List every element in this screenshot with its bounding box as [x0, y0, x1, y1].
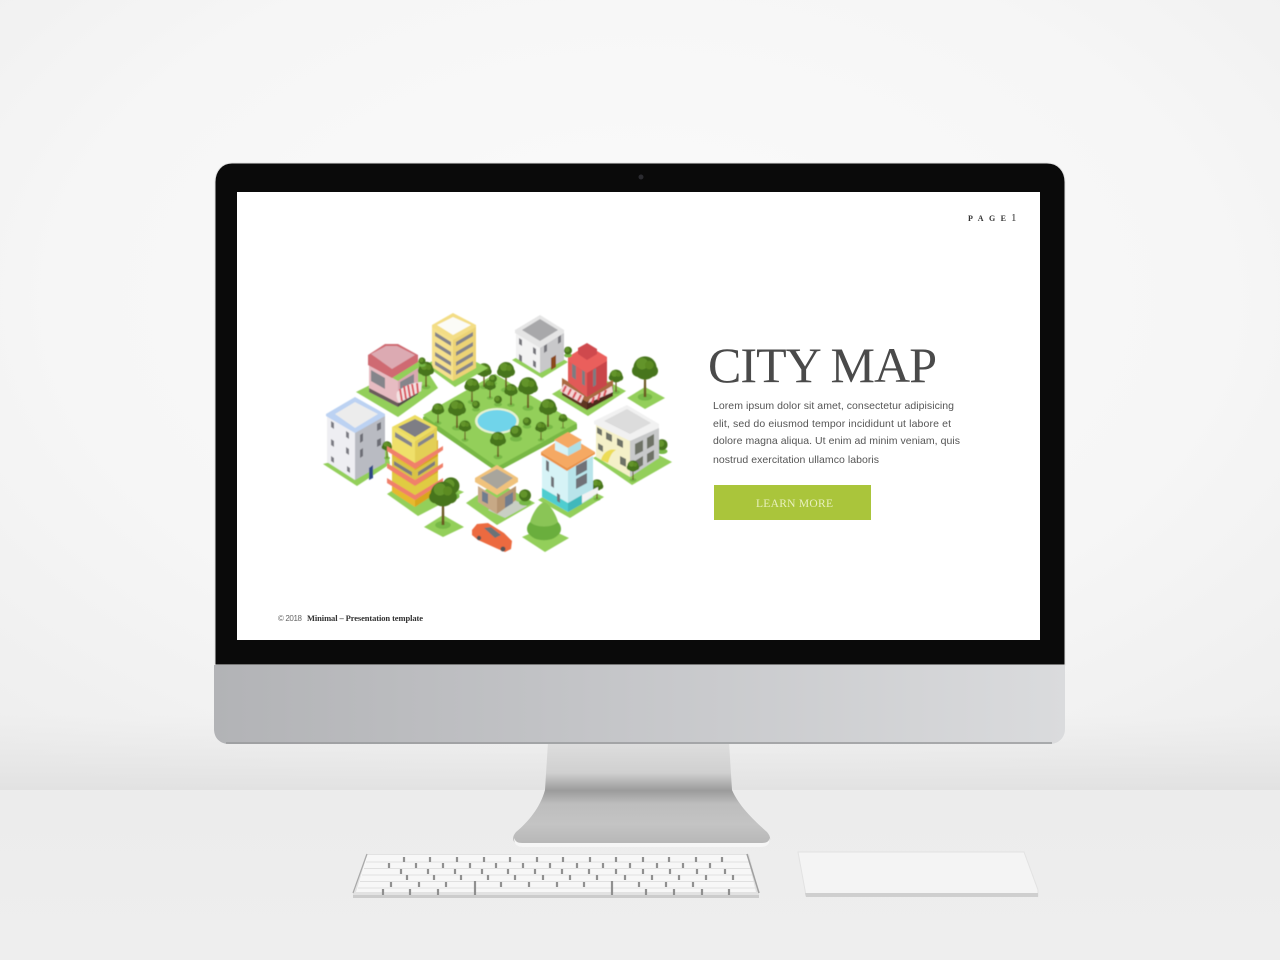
- white and grey townhouse: [512, 315, 572, 378]
- park trees: [432, 362, 568, 459]
- monitor bezel: [215, 163, 1065, 665]
- trackpad: [798, 852, 1038, 897]
- monitor stand: [513, 742, 770, 847]
- striped awnings: [560, 384, 613, 403]
- tree on small green plot: [627, 356, 665, 409]
- yellow office tower: [425, 313, 488, 387]
- wall shadow band: [0, 715, 1280, 790]
- page number: [968, 212, 1016, 224]
- light blue house with orange roof: [538, 432, 604, 518]
- white apartment building with blue roof: [323, 397, 392, 486]
- body paragraph: [713, 400, 960, 466]
- keyboard: [353, 854, 759, 898]
- monitor chin: [214, 665, 1065, 744]
- body paragraph: nostrud exercitation ullamco laboris: [713, 454, 879, 466]
- striped awning: [397, 382, 422, 403]
- pink corner shop: [356, 344, 438, 417]
- page number: 1: [1011, 212, 1016, 224]
- body paragraph: elit, sed do eiusmod tempor incididunt ut labore et: [713, 418, 951, 430]
- park lawn with pond and trees: [423, 362, 577, 472]
- cream hotel building: [593, 405, 672, 485]
- webcam: [638, 174, 644, 180]
- body paragraph: Lorem ipsum dolor sit amet, consectetur adipisicing: [713, 400, 954, 412]
- cone shrub on green plot: [522, 502, 569, 552]
- pond: [475, 408, 519, 434]
- title: CITY MAP: [708, 337, 937, 393]
- footer credit: Minimal – Presentation template: [307, 613, 423, 623]
- front tree on green plot: [424, 477, 464, 537]
- city map illustration: [323, 313, 672, 552]
- monitor body: [214, 163, 1065, 744]
- body paragraph: dolore magna aliqua. Ut enim ad minim veniam, quis: [713, 435, 960, 447]
- tan storefront: [466, 465, 535, 525]
- red car: [472, 523, 512, 552]
- learn more button: LEARN MORE: [756, 498, 833, 510]
- desk surface: [0, 790, 1280, 960]
- page number: PAGE: [968, 214, 1006, 223]
- red brick shop building: [552, 343, 626, 416]
- yellow and orange stacked tower: [387, 415, 464, 516]
- learn more button: [714, 485, 871, 520]
- footer credit: © 2018: [278, 614, 303, 623]
- slide screen: [237, 192, 1040, 640]
